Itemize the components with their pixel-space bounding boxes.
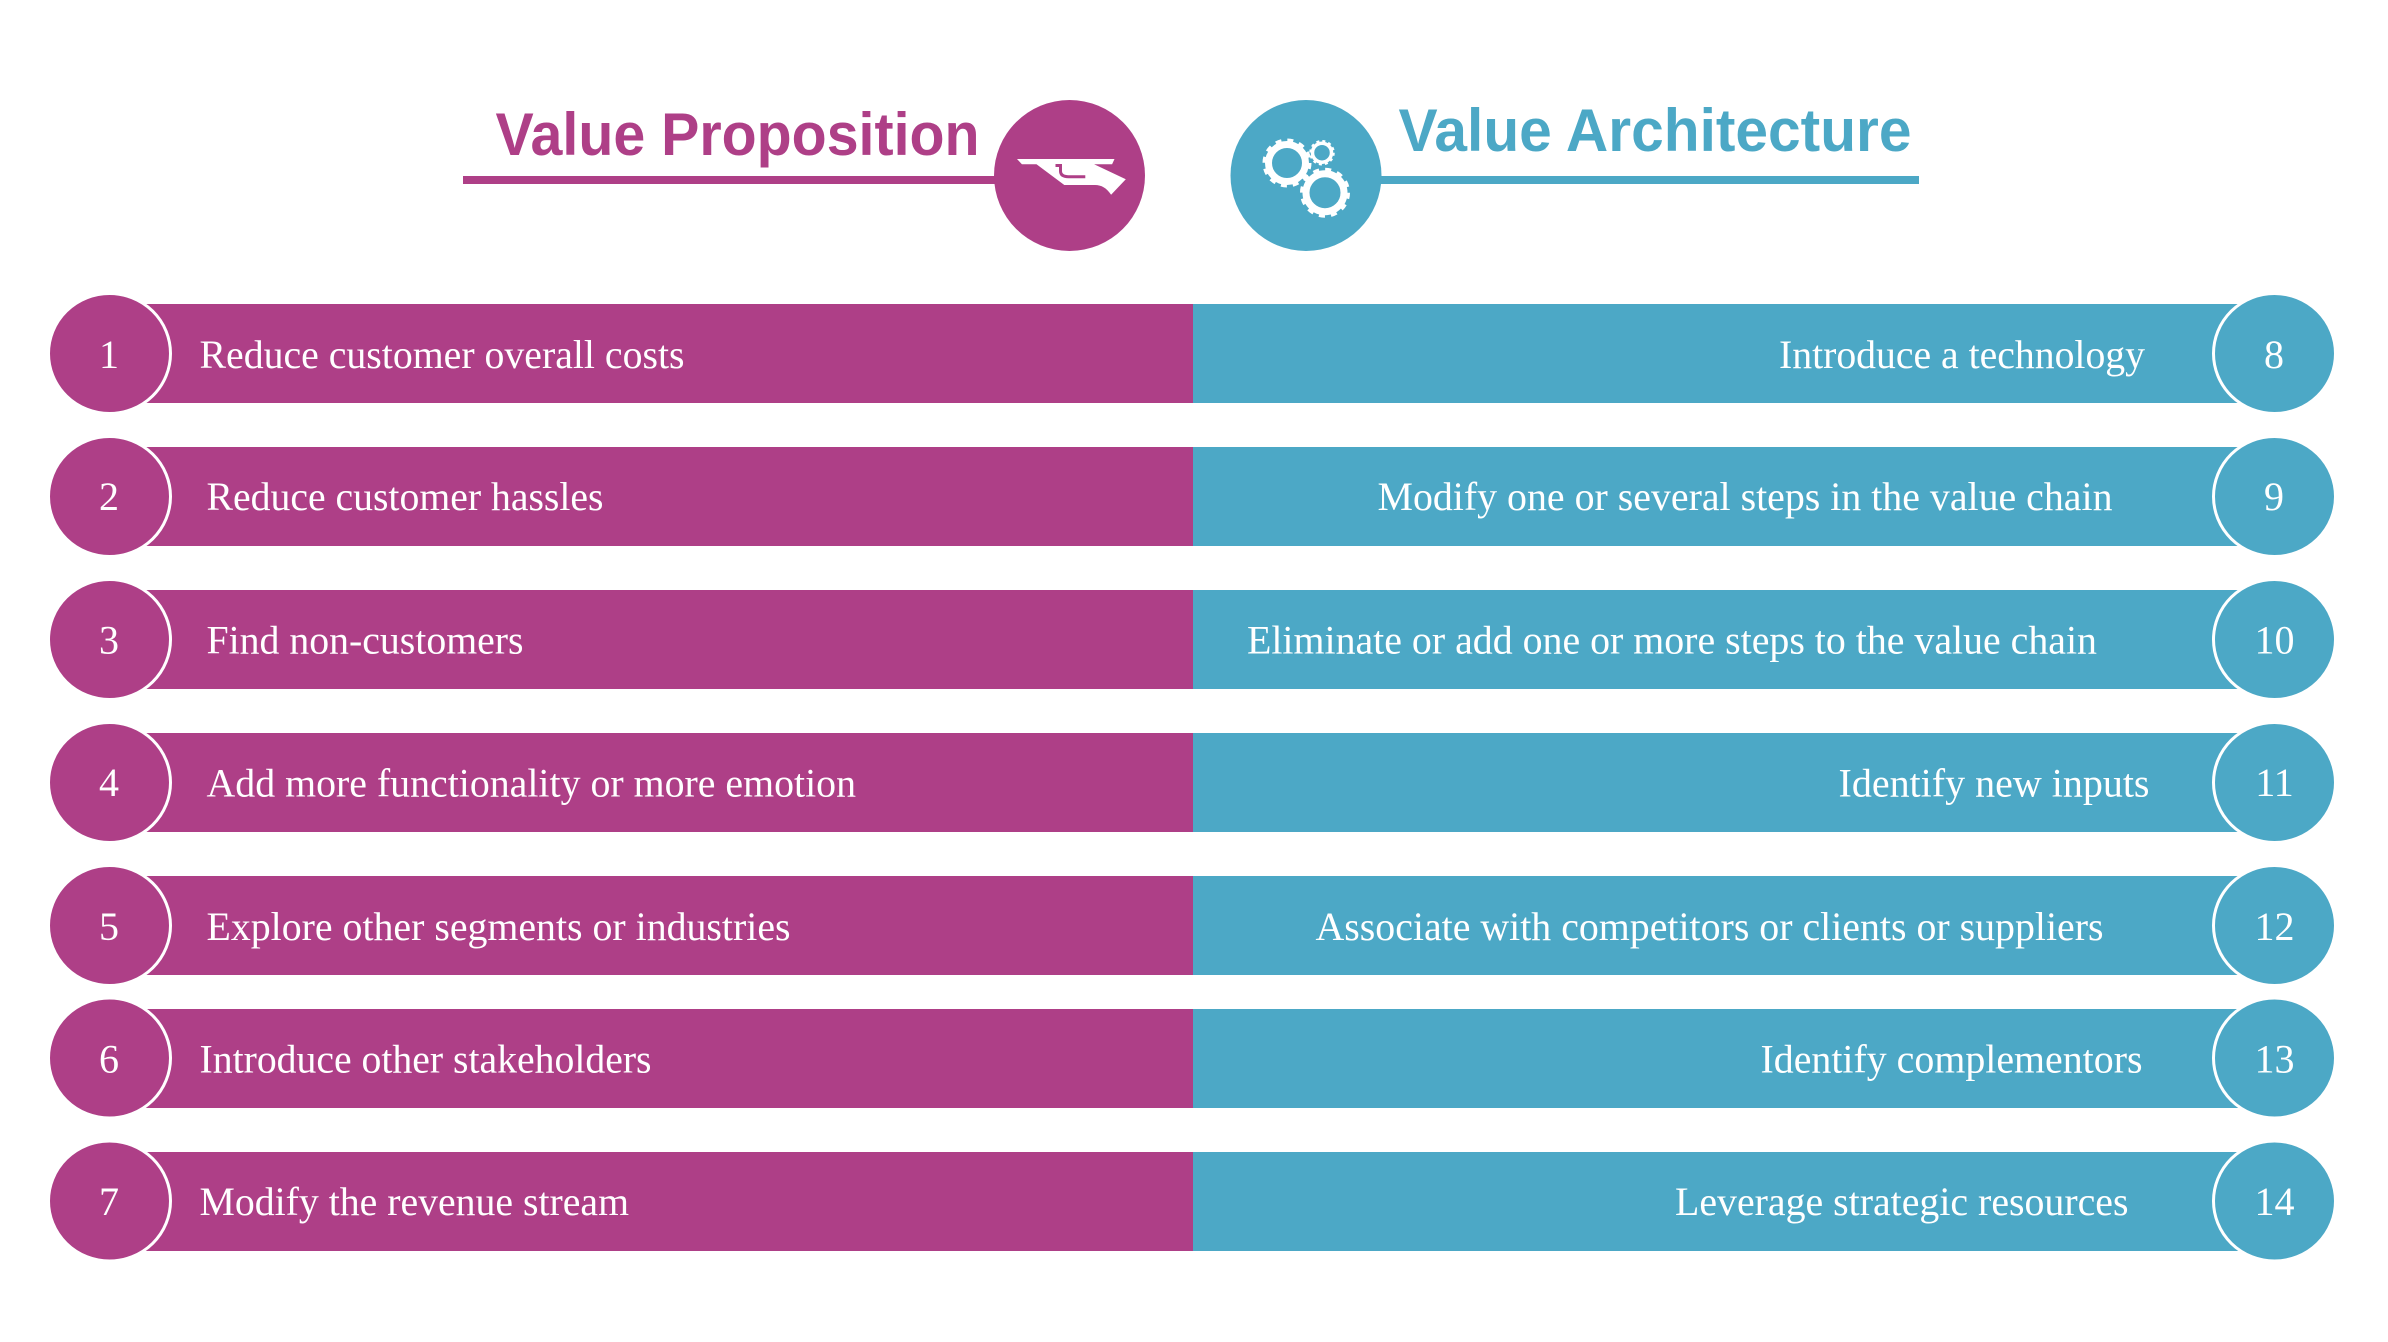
text: item 10: Eliminate or add one or more steps to the value chain <box>1247 618 2097 662</box>
text: item 6: Introduce other stakeholders <box>200 1036 652 1082</box>
badge: 3 <box>48 580 170 700</box>
text: item 11: Identify new inputs <box>1838 760 2150 806</box>
number: 13: 13 <box>2254 1036 2294 1082</box>
number: 2: 2 <box>99 474 119 519</box>
bar: left 4 <box>100 733 1194 832</box>
number: 10: 10 <box>2254 618 2294 662</box>
number: 12: 12 <box>2254 904 2294 949</box>
bar: left 5 <box>100 876 1194 975</box>
text: item 14: Leverage strategic resources <box>1675 1179 2128 1224</box>
row 7 <box>48 1141 2336 1261</box>
bar: left 3 <box>100 590 1194 689</box>
icon: hand holding tray <box>994 100 1145 251</box>
bar: right 14 <box>1193 1152 2290 1251</box>
text: item 4: Add more functionality or more emotion <box>206 760 856 806</box>
badge: 14 <box>2214 1141 2336 1261</box>
badge: 8 <box>2214 294 2336 414</box>
heading: value proposition: Value Proposition <box>496 101 980 168</box>
number: 4: 4 <box>99 760 119 805</box>
number: 8: 8 <box>2264 332 2284 377</box>
bar: right 11 <box>1193 733 2290 832</box>
number: 11: 11 <box>2255 760 2294 805</box>
text: item 13: Identify complementors <box>1760 1036 2142 1082</box>
header: value proposition <box>463 100 1145 251</box>
badge: 13 <box>2214 998 2336 1118</box>
badge: 7 <box>48 1141 170 1261</box>
badge: 2 <box>48 436 170 556</box>
number: 5: 5 <box>99 904 119 949</box>
text: item 7: Modify the revenue stream <box>200 1179 629 1224</box>
row 5 <box>48 866 2336 986</box>
bar: right 8 <box>1193 304 2290 403</box>
text: item 8: Introduce a technology <box>1779 332 2145 377</box>
badge: 9 <box>2214 436 2336 556</box>
bar: right 13 <box>1193 1009 2290 1108</box>
number: 14: 14 <box>2254 1179 2294 1224</box>
number: 1: 1 <box>99 332 119 377</box>
number: 9: 9 <box>2264 474 2284 519</box>
badge: 1 <box>48 294 170 414</box>
row 3 <box>48 580 2336 700</box>
heading underline: value architecture <box>1378 176 1919 184</box>
row 4 <box>48 722 2336 842</box>
text: item 1: Reduce customer overall costs <box>200 332 684 377</box>
text: item 5: Explore other segments or industries <box>206 904 790 949</box>
badge: 4 <box>48 722 170 842</box>
badge: 10 <box>2214 580 2336 700</box>
header: value architecture <box>1230 97 1919 251</box>
text: item 12: Associate with competitors or clients or suppliers <box>1316 904 2104 949</box>
number: 6: 6 <box>99 1036 119 1082</box>
bar: left 6 <box>100 1009 1194 1108</box>
badge: 6 <box>48 998 170 1118</box>
number: 3: 3 <box>99 618 119 662</box>
bar: right 12 <box>1193 876 2290 975</box>
icon: gears <box>1230 100 1382 251</box>
heading underline: value proposition <box>463 176 1000 184</box>
bar: right 10 <box>1193 590 2290 689</box>
badge: 5 <box>48 866 170 986</box>
row 2 <box>48 436 2336 556</box>
badge: 11 <box>2214 722 2336 842</box>
bar: right 9 <box>1193 447 2290 546</box>
number: 7: 7 <box>99 1179 119 1224</box>
bar: left 1 <box>100 304 1194 403</box>
heading: value architecture: Value Architecture <box>1398 97 1912 164</box>
row 6 <box>48 998 2336 1118</box>
text: item 9: Modify one or several steps in the value chain <box>1378 474 2112 519</box>
text: item 3: Find non-customers <box>206 618 524 662</box>
badge: 12 <box>2214 866 2336 986</box>
bar: left 2 <box>100 447 1194 546</box>
row 1 <box>48 294 2336 414</box>
text: item 2: Reduce customer hassles <box>206 474 604 519</box>
bar: left 7 <box>100 1152 1194 1251</box>
